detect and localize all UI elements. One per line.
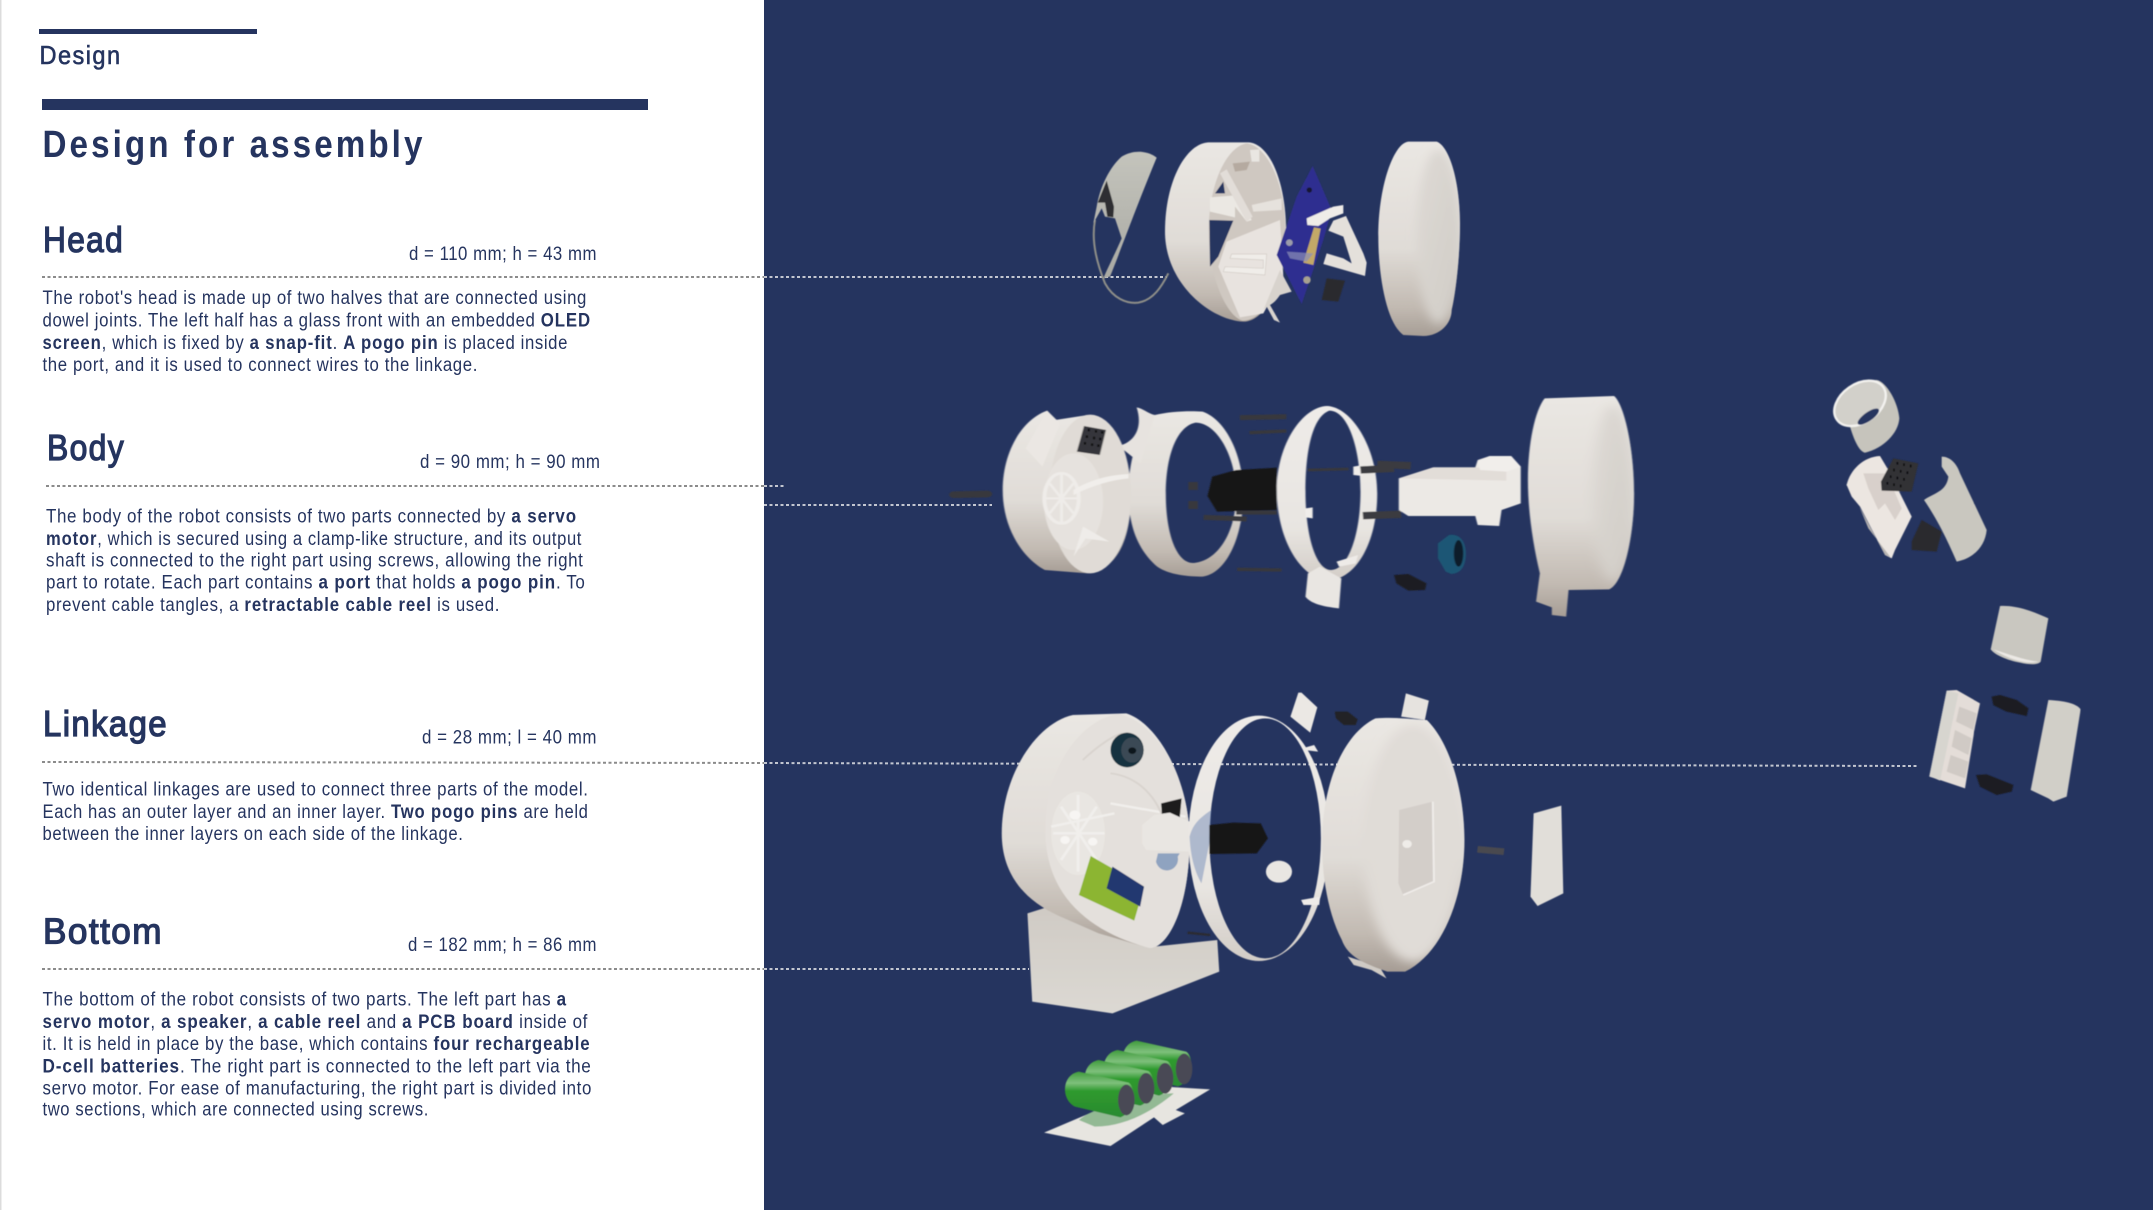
screws [954,417,1349,570]
text block: body description: shaft is connected to the right part using screws, allowing the right [46,550,584,572]
D-cell batteries [1065,1041,1192,1117]
servo motor [1209,823,1268,854]
linkage upper inner half [1847,456,1912,558]
dimensions: head: d = 110 mm; h = 43 mm [409,244,597,265]
section tab: Design: Design [40,40,122,70]
text block: bottom description [42,990,592,1120]
text block: head description: screen, which is fixed by a snap-fit. A pogo pin is placed inside [42,333,568,354]
text block: bottom description: D-cell batteries. The right part is connected to the left part via the [42,1056,592,1078]
black connector [1077,426,1106,455]
linkage lower cap [1991,606,2048,664]
access panel [1530,806,1563,906]
text block: body description [46,506,586,616]
panel: dark background [764,0,2153,1210]
text block: bottom description: servo motor, a speaker, a cable reel and a PCB board inside of [42,1012,588,1033]
base [1027,903,1219,1013]
glass front [1093,152,1168,303]
text block: bottom description: The bottom of the robot consists of two parts. The left part has a [42,990,567,1010]
text block: linkage description [42,780,588,845]
text block: linkage description: between the inner layers on each side of the linkage. [42,824,464,845]
text block: bottom description: it. It is held in place by the base, which contains four rechargeable [42,1034,590,1055]
section: Linkage [42,703,597,845]
title: Design for assembly: Design for assembly [42,124,426,166]
body left housing [1003,411,1131,573]
text block: linkage description: Two identical linkages are used to connect three parts of the model. [42,780,588,800]
battery plate [1044,1086,1210,1146]
text block: body description: part to rotate. Each part contains a port that holds a pogo pin. To [46,572,586,594]
title: Design for assembly [42,99,648,166]
text block: body description: motor, which is secured using a clamp-like structure, and its output [46,529,582,550]
body ring 1 [1119,407,1243,577]
linkage connector [1881,458,1918,492]
heading: Body: Body [47,427,125,468]
text block: body description: prevent cable tangles, a retractable cable reel is used. [46,595,500,616]
connector box [1399,456,1521,526]
left housing [1002,713,1190,948]
heading: Head: Head [43,219,124,260]
exploded view: linkage [1826,371,2081,802]
text block: bottom description: two sections, which are connected using screws. [42,1100,429,1120]
head left half [1165,142,1292,323]
snap-fit bracket [1307,205,1367,276]
dimensions: linkage: d = 28 mm; l = 40 mm [422,728,597,748]
connector box [1142,798,1190,870]
text block: head description [42,288,591,376]
OLED circuit board [1277,166,1332,304]
section tab: Design [39,29,257,70]
linkage lower outer half [2031,700,2081,802]
linkage pad [1912,520,1942,552]
black pad [1394,574,1427,591]
PCB board [1079,856,1144,921]
ring [1188,693,1329,961]
text block: body description: The body of the robot consists of two parts connected by a servo [46,506,577,528]
section: Bottom [42,910,597,1120]
heading: Bottom: Bottom [43,910,163,952]
text block: linkage description: Each has an outer layer and an inner layer. Two pogo pins are held [42,802,588,823]
cable reel [1438,535,1466,574]
head right half [1378,142,1460,336]
exploded view: head [1093,142,1460,336]
exploded view: body [954,396,1634,617]
linkage upper outer cap [1826,371,1899,453]
dimensions: body: d = 90 mm; h = 90 mm [420,452,600,473]
speaker [1110,733,1144,767]
servo motor [1207,468,1277,512]
body ring 2 [1277,406,1377,608]
linkage upper outer half [1924,457,1987,562]
black pad [1335,712,1358,725]
section: Head [42,219,597,376]
small white part [1266,861,1292,883]
section: Body [46,427,600,616]
black pogo pad [1322,278,1345,302]
cover [1322,693,1464,978]
screw [1477,849,1504,852]
dimensions: bottom: d = 182 mm; h = 86 mm [408,935,597,956]
text block: head description: the port, and it is used to connect wires to the linkage. [42,355,478,376]
linkage lower inner half [1929,690,1980,788]
text block: head description: dowel joints. The left half has a glass front with an embedded OLED [42,310,591,332]
text block: bottom description: servo motor. For ease of manufacturing, the right part is divided into [42,1078,592,1100]
text block: head description: The robot's head is made up of two halves that are connected using [42,288,587,309]
screw [1188,933,1210,935]
heading: Linkage: Linkage [43,703,168,744]
screws right [1360,464,1411,516]
linkage pads [1976,695,2028,795]
body cap [1528,396,1634,617]
dashed leader lines [42,277,1917,969]
exploded view: bottom [1002,693,1563,1146]
